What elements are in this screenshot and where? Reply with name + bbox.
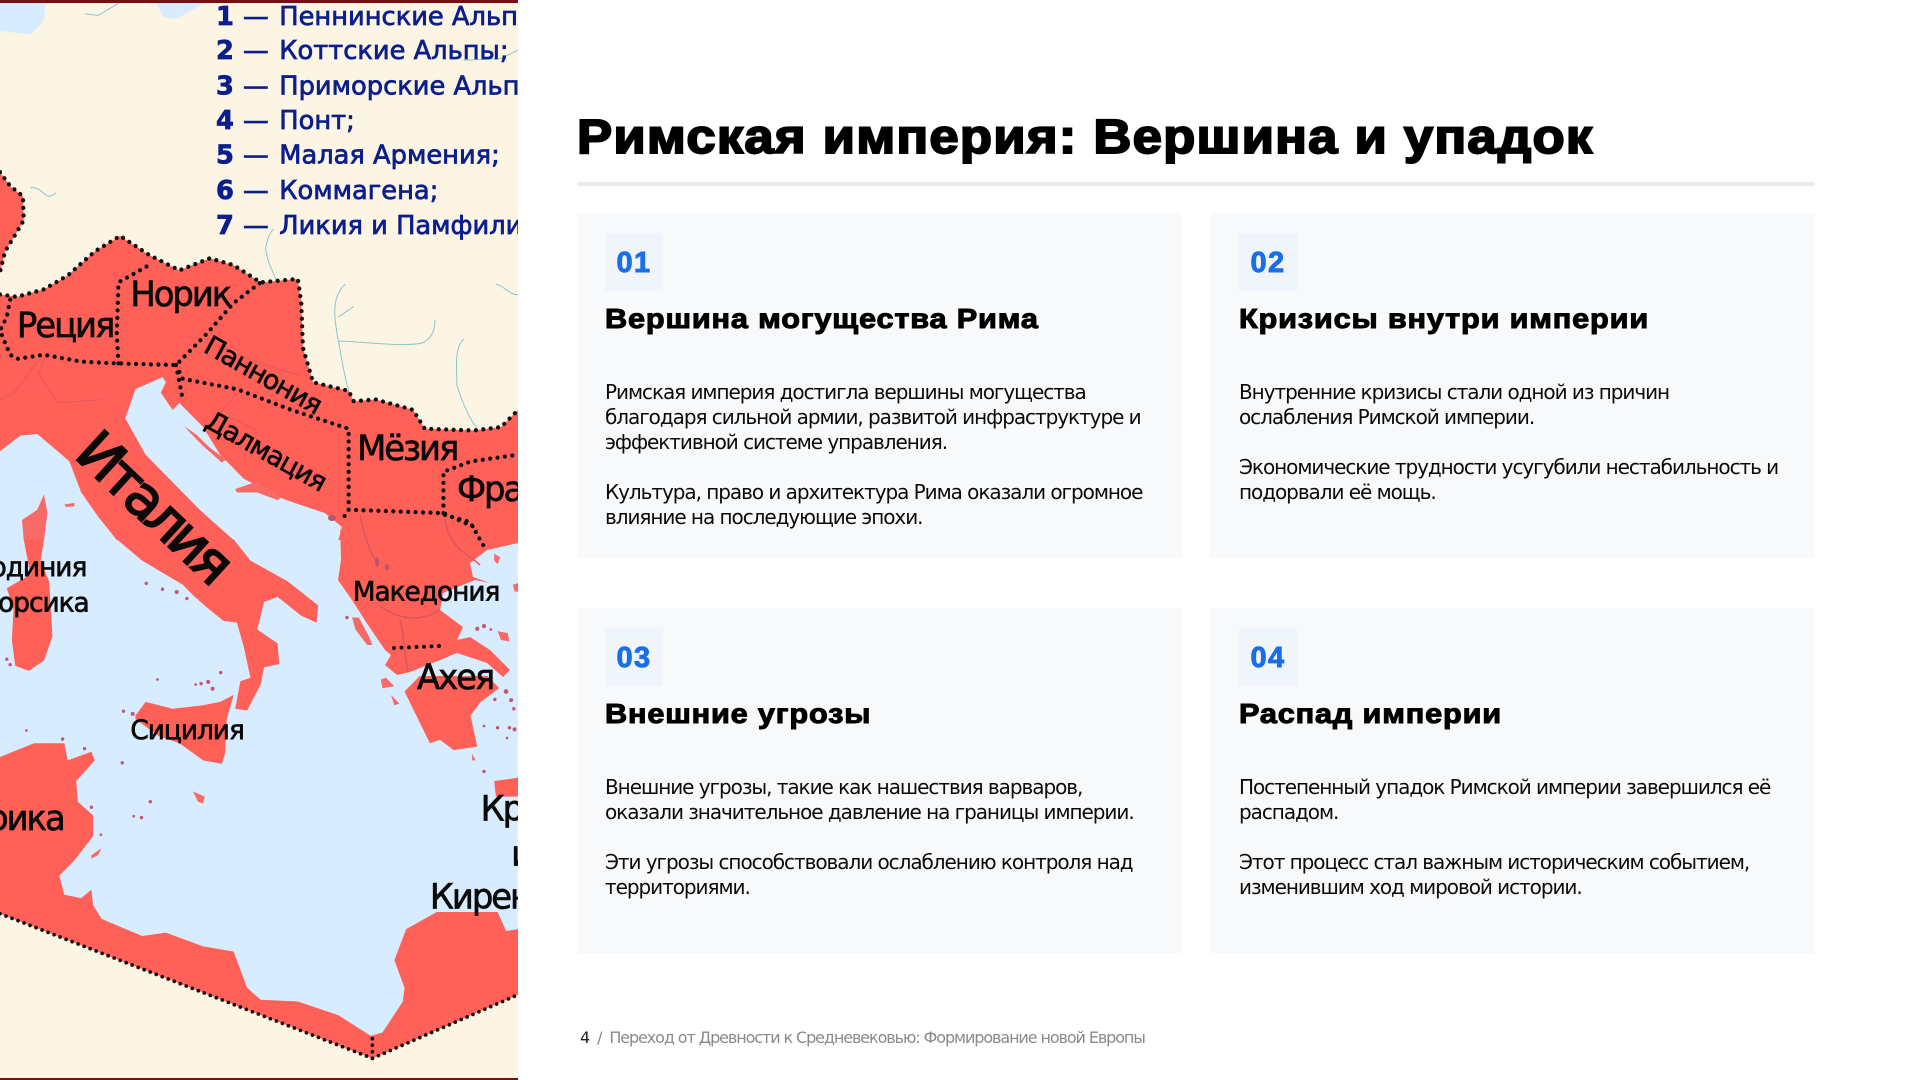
map: southern half with Mediterranean (0, 539, 518, 1058)
card number (1239, 628, 1297, 686)
legend: province list: 2 (216, 36, 234, 66)
card text: влияние на последующие эпохи. (605, 505, 922, 529)
card text: Экономические трудности усугубили нестабильность и (1239, 455, 1778, 479)
footer: page number and deck title: 4 / Переход от Древности к Средневековью: Формирование новой Европы (580, 1028, 1145, 1047)
card number (605, 233, 663, 291)
legend: province list: — (243, 72, 269, 102)
card text: Этот процесс стал важным историческим событием, (1239, 850, 1749, 874)
card heading: Кризисы внутри империи (1239, 303, 1649, 334)
legend: province list: 5 (216, 140, 234, 171)
land: Peloponnese and Crete (405, 676, 518, 797)
labels: northern provinces: Далмация (200, 405, 331, 498)
legend: province list: — (243, 106, 269, 136)
card text (1239, 380, 1778, 504)
panel: card 03 (577, 608, 1182, 953)
legend: province list: — (243, 36, 269, 66)
card text: изменившим ход мировой истории. (1239, 875, 1582, 899)
legend: province list: — (243, 211, 269, 241)
card number: 03 (616, 642, 652, 674)
card text: ослабления Римской империи. (1239, 405, 1534, 429)
legend: province list: Коттские Альпы; (279, 36, 509, 66)
land: Africa (0, 743, 518, 1058)
card text: территориями. (605, 875, 750, 899)
card text: оказали значительное давление на границы империи. (605, 800, 1134, 824)
card text: подорвали её мощь. (1239, 480, 1436, 504)
legend: province list: 1 (216, 2, 234, 32)
card heading: Внешние угрозы (605, 698, 871, 729)
labels: northern provinces: Мёзия (357, 429, 457, 469)
card text: эффективной системе управления. (605, 430, 947, 454)
card number: 04 (1250, 642, 1286, 674)
labels: northern provinces (17, 275, 579, 596)
card text (1239, 775, 1770, 899)
land: southern Italy (117, 539, 318, 710)
card text: Эти угрозы способствовали ослаблению контроля над (605, 850, 1133, 874)
land: Balkans and northern Greece (338, 523, 518, 677)
inland lines and lakes (0, 336, 301, 431)
card text: благодаря сильной армии, развитой инфраструктуре и (605, 405, 1141, 429)
labels: southern provinces: Ахея (417, 658, 493, 698)
panel: card 02 (1210, 213, 1815, 558)
legend: province list: Понт; (279, 106, 355, 136)
card number: 02 (1250, 247, 1286, 279)
card number: 01 (616, 247, 652, 279)
card text (605, 380, 1142, 529)
legend: province list: Малая Армения; (279, 140, 500, 171)
labels: northern provinces: Норик (130, 275, 232, 315)
card text: Римская империя достигла вершины могущества (605, 380, 1086, 404)
card text: распадом. (1239, 800, 1338, 824)
legend: province list: 6 (216, 176, 234, 206)
legend: province list: 3 (216, 72, 234, 102)
card text: Культура, право и архитектура Рима оказали огромное (605, 480, 1142, 504)
map: northern half with provinces (0, 3, 518, 540)
title: Римская империя: Вершина и упадок (577, 111, 1593, 164)
land: Sicily (135, 695, 234, 764)
card text (605, 775, 1134, 899)
panel: card 01 (577, 213, 1182, 558)
land: Corsica and Sardinia (7, 539, 52, 671)
card heading: Распад империи (1239, 698, 1502, 729)
legend: province list: — (243, 140, 269, 171)
labels: southern provinces (0, 552, 606, 918)
sea (0, 540, 518, 1043)
Balkan details: inner lines, lakes and dotted border (328, 515, 486, 672)
legend: province list: — (243, 176, 269, 206)
small islands (91, 554, 518, 859)
islands (22, 426, 281, 540)
labels: southern provinces: Македония (353, 576, 499, 607)
labels: northern provinces: Италия (63, 419, 244, 596)
labels: northern provinces: Реция (17, 306, 113, 346)
map frame: top and bottom borders (0, 0, 518, 1080)
card text: Внутренние кризисы стали одной из причин (1239, 380, 1669, 404)
card number (1239, 233, 1297, 291)
labels: southern provinces: Сицилия (130, 715, 244, 746)
dotted frontier (0, 914, 518, 1058)
legend: province list: 7 (216, 211, 234, 241)
land: northern provinces (0, 172, 518, 540)
labels: northern provinces: Паннония (199, 330, 327, 421)
legend: province list: — (243, 2, 269, 32)
province borders: dotted lines (0, 172, 518, 540)
card heading: Вершина могущества Рима (605, 303, 1039, 334)
legend: province list (216, 2, 548, 241)
card text: Внешние угрозы, такие как нашествия варваров, (605, 775, 1082, 799)
legend: province list: 4 (216, 106, 234, 136)
card number (605, 628, 663, 686)
legend: province list: Коммагена; (279, 176, 438, 206)
panel: card 04 (1210, 608, 1815, 953)
card text: Постепенный упадок Римской империи завершился её (1239, 775, 1770, 799)
seas: Tyrrhenian and Adriatic (0, 377, 342, 540)
panel: map of the Roman Empire (0, 0, 518, 1080)
